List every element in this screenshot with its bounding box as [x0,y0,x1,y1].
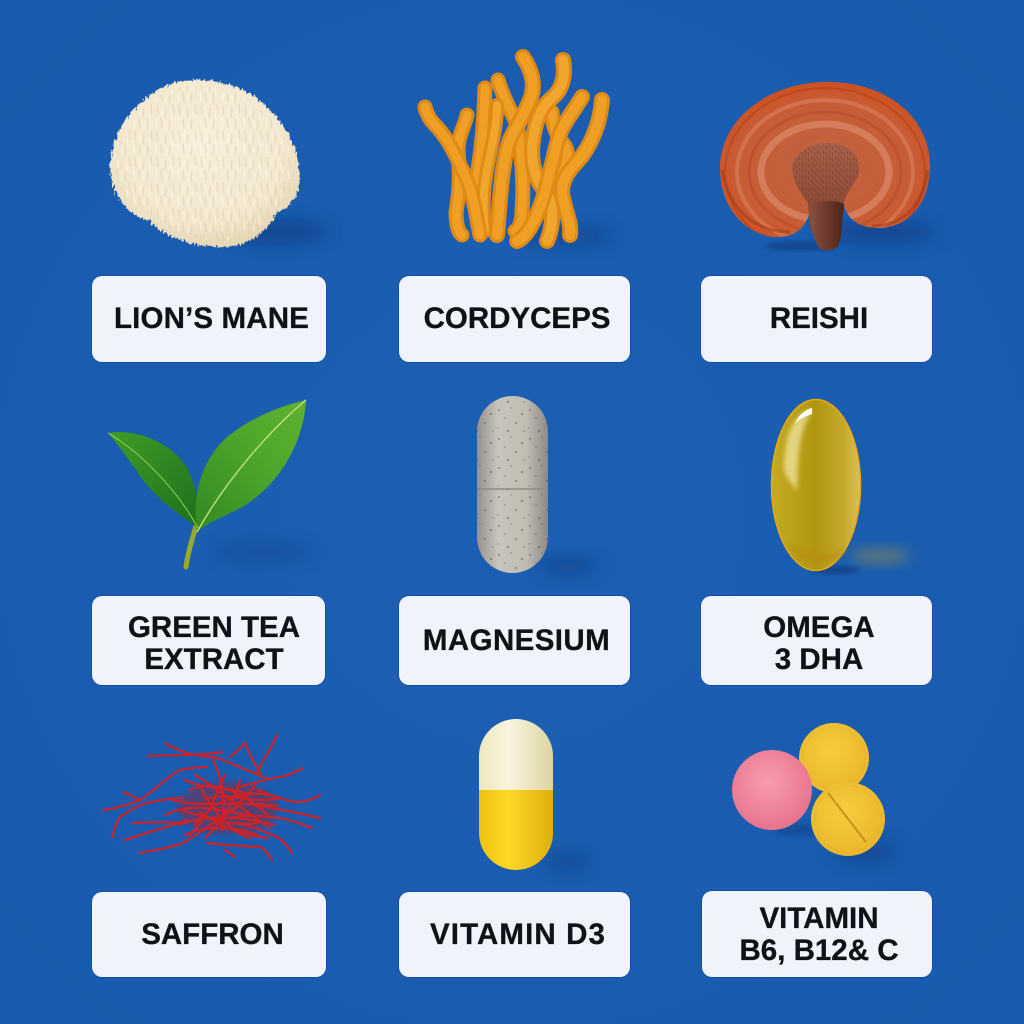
label: Cordyceps [399,276,630,362]
label: Cordyceps: CORDYCEPS [424,302,610,335]
icon: lion's mane mushroom [110,80,330,247]
label: Green Tea Extract: EXTRACT [144,643,284,676]
label: Vitamin B6, B12 & C [702,891,932,977]
icon: saffron threads [103,735,320,860]
label: Magnesium [399,596,630,685]
icon: vitamin D3 capsule [479,719,590,870]
label: Reishi [701,276,932,362]
icon: green tea leaf [108,400,312,567]
label: Magnesium: MAGNESIUM [423,624,610,656]
label: Saffron [92,892,326,977]
label: Vitamin D3 [399,892,630,977]
label: Omega 3 DHA: 3 DHA [775,643,863,676]
label: Reishi: REISHI [770,302,868,335]
label: Omega 3 DHA: OMEGA [763,611,875,644]
icon: cordyceps [425,57,615,244]
label: Green Tea Extract [92,596,325,685]
icon: omega 3 softgel [771,399,910,574]
label: Green Tea Extract: GREEN TEA [128,611,300,644]
label: Vitamin D3: VITAMIN D3 [430,918,606,950]
icon: vitamin tablets [732,723,896,861]
label: Vitamin B6, B12 & C: VITAMIN [759,902,879,935]
label: Saffron: SAFFRON [141,918,284,950]
label: Lion's Mane [92,276,326,362]
label: Vitamin B6, B12 & C: B6, B12& C [739,934,899,967]
label: Lion's Mane: LION’S MANE [114,302,309,335]
label: Omega 3 DHA [701,596,932,685]
icon: magnesium capsule [477,396,598,573]
icon: reishi mushroom [720,82,938,256]
